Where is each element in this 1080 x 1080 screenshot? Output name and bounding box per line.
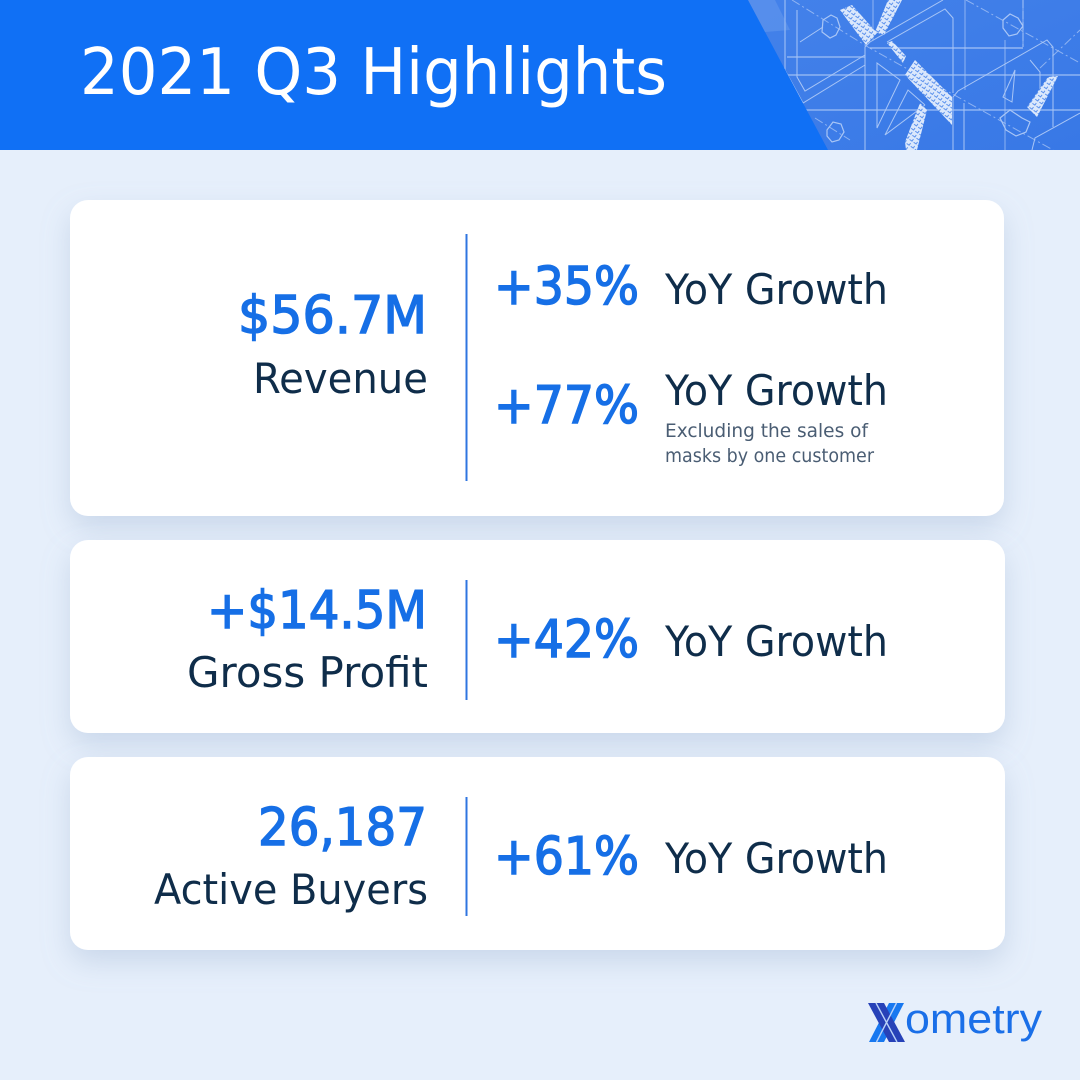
wordmark: ometry	[905, 995, 1042, 1042]
revenue growth: +35%	[494, 257, 639, 317]
title: 2021 Q3 Highlights	[80, 36, 667, 110]
revenue label: Revenue	[253, 354, 428, 403]
small bolts	[822, 14, 1030, 142]
revenue value: $56.7M	[238, 286, 427, 346]
panel: gross profit	[70, 540, 1005, 733]
gross profit value: +$14.5M	[207, 581, 427, 641]
footnote line two: masks by one customer	[665, 445, 874, 467]
active buyers growth: +61%	[494, 827, 639, 887]
panel: active buyers	[70, 757, 1005, 950]
logo: Xometry	[868, 995, 1042, 1042]
gross profit growth label: YoY Growth	[664, 617, 888, 666]
blue banner shape	[0, 0, 828, 150]
panel: revenue	[70, 200, 1004, 516]
blueprint illustration	[785, 0, 1080, 150]
header banner	[0, 0, 1080, 150]
textured lattice strips	[840, 0, 1058, 150]
adjusted revenue growth: +77%	[494, 376, 639, 436]
active buyers growth label: YoY Growth	[664, 834, 888, 883]
icon: X mark	[868, 1003, 905, 1042]
active buyers label: Active Buyers	[154, 865, 428, 914]
adjusted growth label: YoY Growth	[664, 366, 888, 415]
active buyers value: 26,187	[258, 798, 427, 858]
gross profit growth: +42%	[494, 610, 639, 670]
footnote line one: Excluding the sales of	[665, 420, 869, 442]
revenue growth label: YoY Growth	[664, 265, 888, 314]
gross profit label: Gross Profit	[187, 648, 428, 697]
